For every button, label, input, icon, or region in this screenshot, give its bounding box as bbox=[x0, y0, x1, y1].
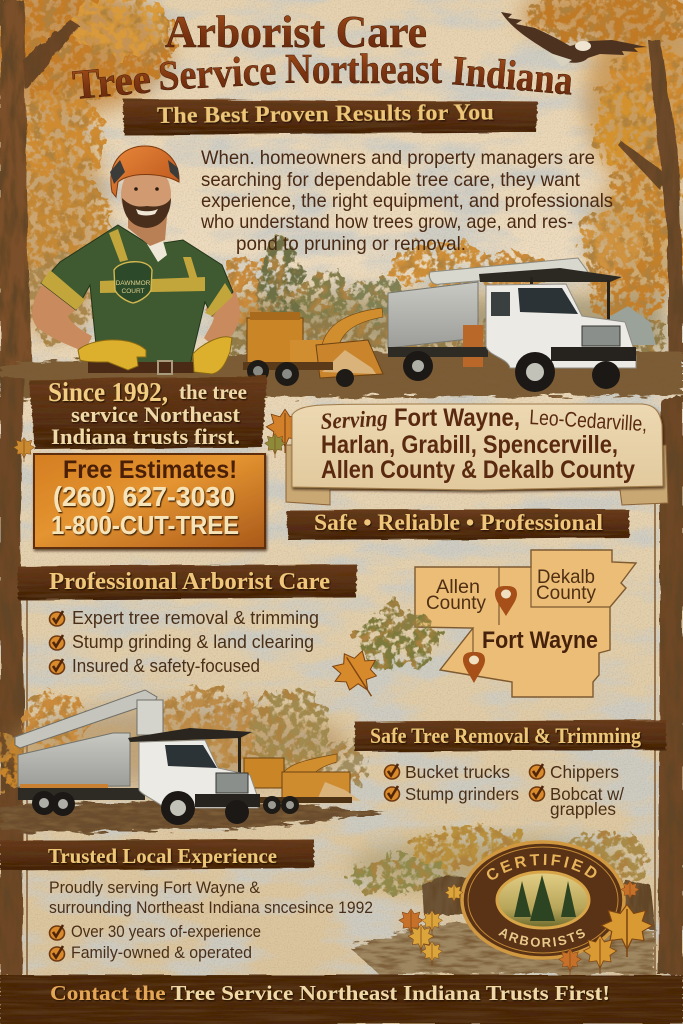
shrubs behind badge bbox=[345, 826, 650, 893]
equipment checklist: Stump grinders bbox=[405, 784, 519, 804]
title: Northeast bbox=[285, 47, 442, 93]
local experience text bbox=[49, 879, 373, 962]
lower ground strip bbox=[0, 802, 385, 832]
chipper trailer lower bbox=[244, 754, 361, 814]
free estimates phone panel: 1-800-CUT-TREE bbox=[51, 510, 239, 540]
fallen maple leaves bbox=[399, 881, 652, 975]
map labels: County bbox=[536, 583, 596, 604]
small tree near map bbox=[356, 602, 440, 670]
left tree trunk bbox=[0, 0, 80, 380]
intro paragraph: pond to pruning or removal. bbox=[236, 233, 466, 255]
intro paragraph bbox=[200, 147, 613, 255]
serving area scroll: Allen County & Dekalb County bbox=[321, 456, 635, 484]
trusted local experience plank: Trusted Local Experience bbox=[48, 844, 277, 868]
map pin Allen bbox=[495, 586, 517, 616]
safe reliable professional plank: Safe • Reliable • Professional bbox=[314, 510, 603, 535]
shirt badge: COURT bbox=[122, 288, 145, 295]
local experience text: surrounding Northeast Indiana sncesince 1992 bbox=[49, 899, 373, 917]
since 1992 plank bbox=[29, 376, 267, 450]
title bbox=[71, 6, 575, 109]
intro paragraph: searching for dependable tree care, they want bbox=[201, 169, 581, 191]
shirt bbox=[41, 225, 233, 365]
eagle bbox=[501, 12, 647, 67]
equipment checklist: Bobcat w/ bbox=[550, 784, 624, 804]
serving area scroll: Leo-Cedarville, bbox=[529, 406, 648, 436]
forest behind lower truck bbox=[0, 688, 367, 790]
equipment checklist bbox=[384, 762, 624, 819]
equipment checklist: Chippers bbox=[550, 762, 619, 782]
house bbox=[598, 306, 656, 345]
neck and head bbox=[128, 205, 168, 246]
map labels bbox=[426, 567, 598, 654]
subtitle plank: The Best Proven Results for You bbox=[157, 99, 494, 128]
autumn leaf near map bbox=[324, 643, 392, 707]
subtitle plank bbox=[123, 99, 538, 135]
free estimates phone panel: (260) 627-3030 bbox=[53, 481, 235, 512]
shirt badge: DAWNMOR bbox=[116, 280, 151, 287]
title: Arborist Care bbox=[165, 6, 427, 57]
safe reliable professional plank bbox=[286, 509, 629, 540]
serving area scroll bbox=[286, 404, 668, 505]
intro paragraph: experience, the right equipment, and professionals bbox=[201, 190, 613, 212]
right tree canopy bbox=[525, 0, 683, 290]
county map bbox=[415, 550, 636, 697]
safe tree removal plank: Safe Tree Removal & Trimming bbox=[370, 723, 641, 748]
safety stripes bbox=[41, 229, 233, 316]
local experience text: Proudly serving Fort Wayne & bbox=[49, 879, 260, 897]
pine trees in badge bbox=[514, 875, 576, 921]
equipment checklist: grapples bbox=[550, 799, 616, 819]
bucket truck top bbox=[388, 258, 636, 392]
right bark border bbox=[658, 395, 683, 975]
equipment checklist: Bucket trucks bbox=[405, 762, 510, 782]
undershirt bbox=[147, 241, 167, 262]
free estimates phone panel: Free Estimates! bbox=[63, 456, 237, 484]
serving area scroll: Fort Wayne, bbox=[394, 404, 520, 432]
belt bbox=[88, 362, 198, 373]
tree line foliage behind vehicles bbox=[215, 237, 665, 352]
bottom call to action band bbox=[0, 975, 683, 1024]
map pin Fort Wayne bbox=[463, 652, 485, 683]
professional arborist care plank: Professional Arborist Care bbox=[49, 569, 330, 595]
professional arborist care plank bbox=[18, 564, 357, 600]
arms bbox=[32, 285, 240, 352]
certified arborists badge: ARBORISTS bbox=[498, 928, 585, 948]
arborist care checklist: Stump grinding & land clearing bbox=[72, 632, 314, 652]
map labels: County bbox=[426, 593, 486, 614]
badge text: CERTIFIED bbox=[486, 854, 596, 880]
hard hat bbox=[111, 146, 179, 197]
since 1992 plank: the tree bbox=[179, 380, 247, 404]
since 1992 plank: Since 1992, bbox=[48, 377, 168, 407]
arborist care checklist bbox=[50, 608, 319, 676]
serving area scroll: Serving bbox=[320, 406, 388, 434]
right tree trunk bbox=[618, 40, 683, 362]
shirt badge bbox=[114, 262, 152, 303]
serving area scroll: Harlan, Grabill, Spencerville, bbox=[321, 431, 618, 459]
stump and rocky ground bbox=[350, 875, 655, 975]
left tree canopy bbox=[0, 0, 175, 345]
local experience text: Over 30 years of-experience bbox=[71, 923, 261, 941]
since 1992 plank: Indiana trusts first. bbox=[51, 424, 240, 449]
title: Tree bbox=[71, 56, 153, 109]
trusted local experience plank bbox=[0, 839, 314, 871]
map labels: Allen bbox=[436, 577, 480, 598]
arborist care checklist: Insured & safety-focused bbox=[72, 656, 260, 676]
autumn forest background upper bbox=[0, 0, 683, 380]
intro paragraph: When. homeowners and property managers are bbox=[201, 147, 595, 169]
gloves bbox=[78, 340, 146, 370]
left bark border bbox=[0, 378, 24, 975]
arborist worker bbox=[32, 146, 240, 374]
service frame lines bbox=[27, 500, 655, 975]
title: Indiana bbox=[450, 48, 575, 105]
arborist care checklist: Expert tree removal & trimming bbox=[72, 608, 319, 628]
certified arborists badge bbox=[460, 840, 626, 960]
intro paragraph: who understand how trees grow, age, and res- bbox=[200, 211, 573, 233]
maple leaf cluster bbox=[14, 409, 304, 462]
map labels: Dekalb bbox=[537, 567, 595, 588]
local experience text: Family-owned & operated bbox=[71, 944, 252, 962]
title: Service bbox=[157, 48, 277, 100]
chipper trailer top bbox=[243, 308, 383, 387]
free estimates phone panel bbox=[34, 454, 265, 548]
ground strip under vehicles bbox=[0, 351, 683, 400]
bucket truck lower bbox=[15, 690, 260, 825]
since 1992 plank: service Northeast bbox=[71, 402, 241, 427]
map labels: Fort Wayne bbox=[482, 627, 598, 654]
soft canopy tone bbox=[0, 0, 683, 350]
bottom call to action band: Contact the Tree Service Northeast Indiana Trusts First! bbox=[50, 981, 610, 1005]
